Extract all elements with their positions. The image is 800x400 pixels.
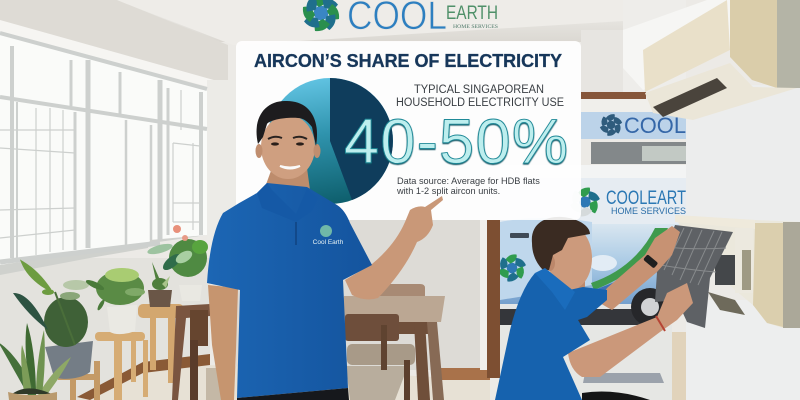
van text: COOLEART [606, 188, 686, 209]
sign text: COOL [624, 113, 686, 138]
polo shirt [207, 183, 372, 398]
zz plant [13, 263, 89, 347]
brown pot [148, 290, 172, 307]
big percentage: 40-50% [344, 107, 568, 177]
leafy plant centre [85, 268, 145, 311]
air filter [655, 225, 733, 328]
face [548, 226, 592, 290]
upper arm [598, 226, 680, 310]
flowering plant [146, 225, 208, 277]
window with white frames and grilles [0, 32, 207, 275]
eyes [271, 142, 304, 146]
dining table and chairs [172, 284, 445, 400]
company logo [302, 0, 498, 38]
green swoosh [591, 228, 668, 290]
van logo [569, 188, 601, 216]
snake plant pot [8, 392, 57, 400]
data source note: with 1-2 split aircon units. [396, 186, 500, 196]
technician [495, 217, 693, 400]
collar [257, 183, 318, 222]
right wall [686, 85, 800, 400]
trousers [237, 388, 349, 400]
HOME SERVICES on van: HOME SERVICES [611, 206, 686, 216]
van underside [500, 304, 650, 309]
service van [497, 165, 686, 400]
data source note [396, 176, 540, 196]
grey pot [45, 341, 93, 379]
ear [545, 255, 555, 271]
subtitle [396, 84, 564, 109]
hair [257, 101, 317, 146]
plant stand [58, 361, 100, 400]
white pot [107, 305, 137, 334]
small van logo [497, 254, 527, 282]
door frame [480, 220, 500, 378]
eyebrows [268, 137, 307, 139]
upper aircon unit [643, 0, 800, 120]
right arm [345, 196, 443, 299]
panel title: AIRCON’S SHARE OF ELECTRICITY [254, 51, 562, 71]
stool centre [95, 332, 148, 400]
shirt logo: Cool Earth [313, 239, 344, 246]
subtitle: TYPICAL SINGAPOREAN [414, 84, 544, 96]
lower arm [568, 283, 693, 377]
stool right [138, 304, 184, 383]
hair [532, 217, 590, 270]
shirt logo [313, 225, 344, 246]
neck [264, 168, 310, 214]
bracelet [656, 316, 665, 331]
small plant [152, 262, 170, 290]
info panel [236, 41, 581, 220]
shop sign behind van [581, 92, 686, 165]
white pot right [179, 285, 202, 301]
left arm [208, 285, 238, 400]
logo EARTH: EARTH [446, 3, 498, 24]
placket [295, 222, 297, 245]
neck [548, 265, 585, 293]
data source note: Data source: Average for HDB flats [397, 176, 540, 186]
ears [256, 144, 320, 158]
face [261, 115, 315, 179]
pie chart [267, 78, 393, 204]
shirt collar [535, 268, 575, 310]
logo emblem [302, 0, 340, 32]
trousers [582, 392, 650, 400]
logo tagline: HOME SERVICES [453, 24, 498, 30]
watch [643, 254, 658, 269]
snake plant [0, 323, 71, 396]
sign logo [599, 114, 623, 136]
potted plants and wooden stools [0, 225, 208, 400]
van wheel [631, 288, 669, 326]
presenter [207, 101, 443, 400]
subtitle: HOUSEHOLD ELECTRICITY USE [396, 97, 564, 109]
lower aircon unit with open panel [655, 215, 800, 328]
smile [280, 166, 300, 168]
shirt [495, 273, 607, 400]
driveway [500, 325, 672, 400]
